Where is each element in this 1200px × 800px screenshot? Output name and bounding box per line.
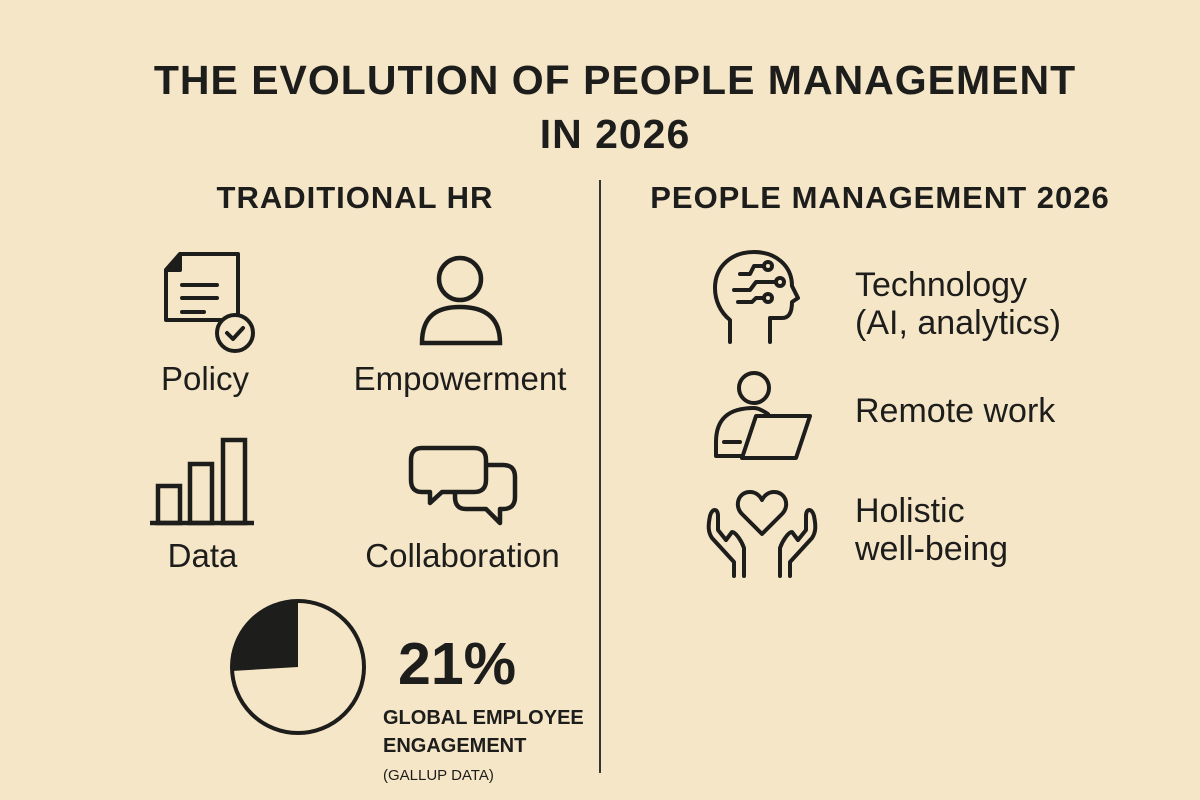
stat caption: ENGAGEMENT [383,735,526,757]
stat caption: (GALLUP DATA) [383,767,494,784]
label: empowerment: Empowerment [354,360,566,397]
stat: 21%: 21% [398,631,516,697]
label: collaboration: Collaboration [365,537,560,574]
divider [599,180,601,773]
text: technology: Technology [855,266,1027,304]
icon: hands with heart [706,490,818,578]
label: data: Data [168,537,237,574]
stat caption [383,707,584,784]
text: holistic well-being: Holistic [855,492,965,530]
title: THE EVOLUTION OF PEOPLE MANAGEMENT [154,57,1076,103]
heading: people management 2026: PEOPLE MANAGEMENT 2026 [650,180,1110,215]
text: technology: (AI, analytics) [855,304,1061,342]
icon: chat bubbles [408,446,518,526]
text: holistic well-being [855,492,1008,568]
title [154,57,1076,157]
text: technology [855,266,1061,342]
label: policy: Policy [161,360,249,397]
icon: AI head [713,250,800,344]
icon: policy document [164,252,255,353]
icon: remote worker [714,371,812,460]
icon: bar chart [150,438,254,526]
title: IN 2026 [540,111,690,157]
stat caption: GLOBAL EMPLOYEE [383,707,584,729]
text: remote work: Remote work [855,392,1055,430]
chart: pie 21% [230,599,366,735]
icon: person [420,256,502,346]
text: holistic well-being: well-being [855,530,1008,568]
heading: traditional HR: TRADITIONAL HR [217,180,493,215]
